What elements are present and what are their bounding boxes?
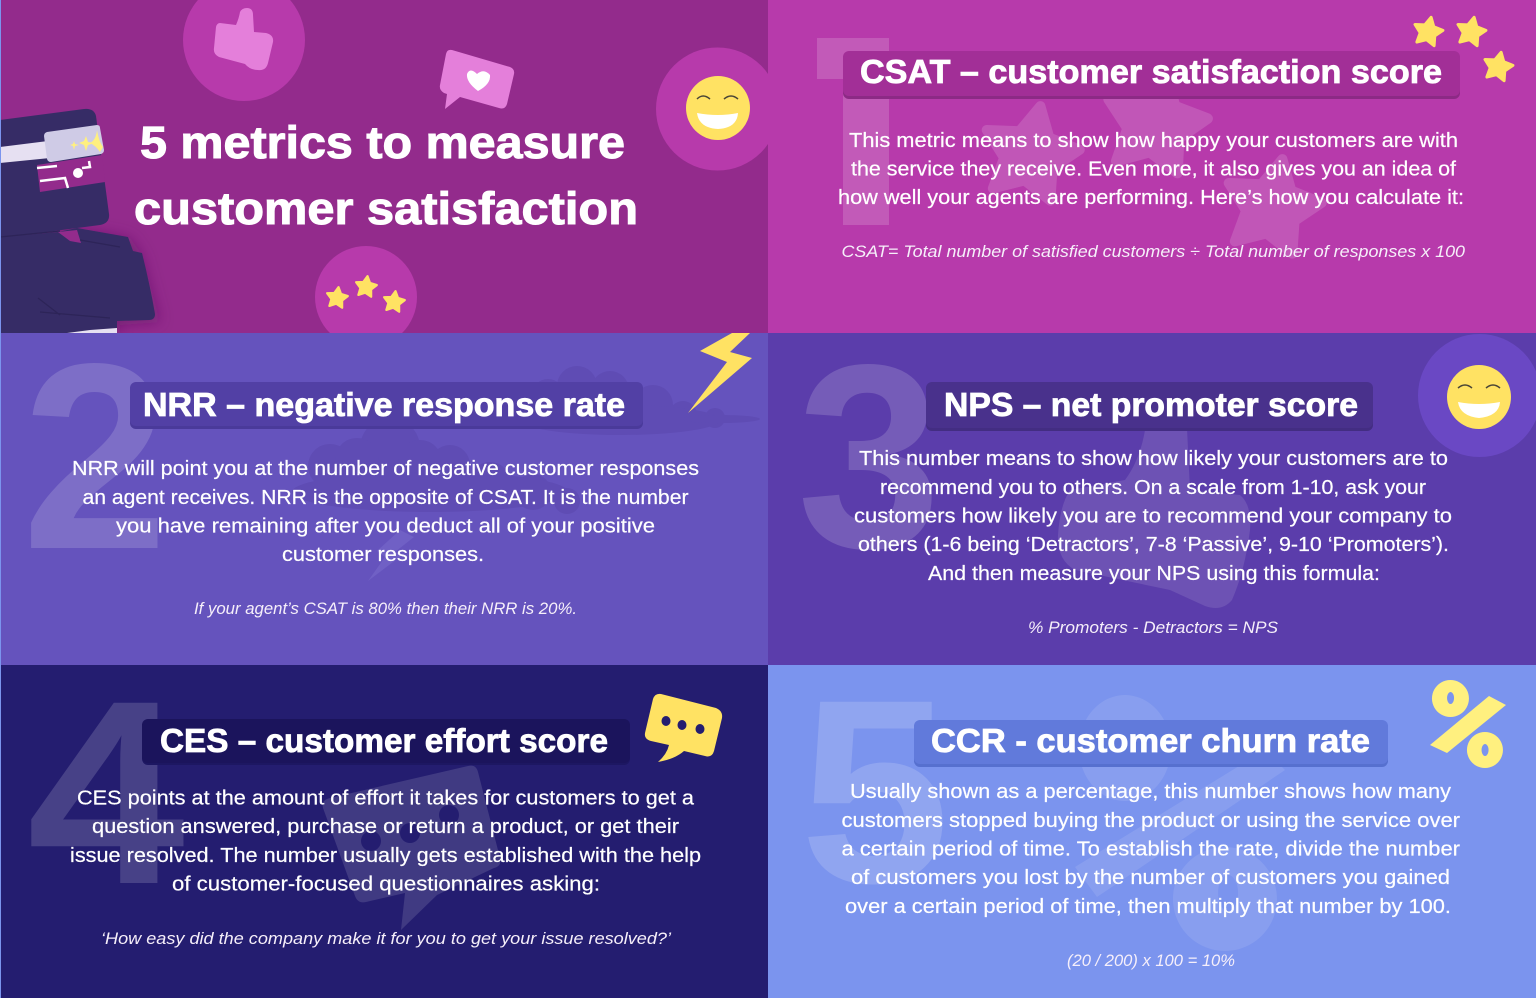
- heading: CES: CES – customer effort score: [160, 722, 608, 759]
- icon: three stars in circle: [315, 246, 417, 348]
- icon: smiling emoji in circle: [656, 48, 779, 170]
- body text: CCR: of customers you lost by the number of customers you gained: [851, 867, 1450, 889]
- panel: title: [0, 0, 779, 348]
- body text: NPS: recommend you to others. On a scale from 1-10, ask your: [880, 477, 1426, 499]
- body text: CCR: over a certain period of time, then multiply that number by 100.: [845, 896, 1451, 918]
- left edge line: [0, 0, 1, 998]
- background lightning: [368, 530, 414, 581]
- body text: NRR: you have remaining after you deduct all of your positive: [116, 516, 655, 538]
- body text: CCR: a certain period of time. To establish the rate, divide the number: [842, 838, 1460, 860]
- heading: CCR: [914, 720, 1388, 767]
- title: 5 metrics to measure: [140, 117, 625, 168]
- body text: NPS: others (1-6 being ‘Detractors’, 7-8 ‘Passive’, 9-10 ‘Promoters’).: [858, 534, 1449, 556]
- body text: NPS: And then measure your NPS using this formula:: [928, 563, 1380, 585]
- body text: NPS: This number means to show how likely your customers are to: [859, 448, 1448, 470]
- panel: NRR: [0, 309, 768, 666]
- body text: CCR: Usually shown as a percentage, this number shows how many: [850, 781, 1451, 803]
- body text: NRR: customer responses.: [282, 544, 484, 566]
- background thumbs up: [1058, 427, 1250, 608]
- background number 1: [817, 38, 889, 225]
- body text: NRR: [72, 458, 699, 566]
- body text: CCR: [842, 781, 1460, 918]
- heading: NPS: [926, 382, 1373, 431]
- heading: CCR: CCR - customer churn rate: [931, 722, 1370, 759]
- icon: thumbs up in circle: [183, 0, 305, 101]
- body text: NRR: an agent receives. NRR is the opposite of CSAT. It is the number: [82, 487, 689, 509]
- panel: CCR: [768, 645, 1536, 998]
- icon: yellow percent sign: [1430, 680, 1506, 768]
- formula: CCR: (20 / 200) x 100 = 10%: [1067, 951, 1235, 970]
- background clouds: [292, 366, 760, 514]
- icon: yellow stars: [1412, 14, 1515, 82]
- heading: CSAT: CSAT – customer satisfaction score: [860, 53, 1442, 90]
- body text: CES: of customer-focused questionnaires asking:: [172, 874, 600, 896]
- panel: NPS: [768, 310, 1536, 666]
- body text: CSAT: [838, 130, 1464, 209]
- background number 1: 1: [850, 155, 880, 211]
- panel: CES: [0, 646, 768, 998]
- body text: CES: [70, 788, 701, 896]
- body text: NPS: [854, 448, 1452, 585]
- body text: NRR: NRR will point you at the number of negative customer responses: [72, 458, 699, 480]
- example: NRR: If your agent’s CSAT is 80% then their NRR is 20%.: [194, 599, 577, 618]
- body text: CCR: customers stopped buying the product or using the service over: [842, 810, 1460, 832]
- background number 3: 3: [797, 310, 941, 603]
- heading: NRR: NRR – negative response rate: [143, 386, 625, 423]
- icon: heart speech bubble: [440, 50, 514, 109]
- title: customer satisfaction: [134, 183, 638, 234]
- icon: yellow chat bubble: [645, 694, 722, 762]
- body text: CSAT: This metric means to show how happy your customers are with: [849, 130, 1458, 152]
- formula: CSAT: CSAT= Total number of satisfied customers ÷ Total number of responses x 100: [842, 242, 1466, 261]
- title: [134, 117, 638, 234]
- heading: NPS: NPS – net promoter score: [944, 386, 1358, 423]
- body text: NPS: customers how likely you are to recommend your company to: [854, 506, 1452, 528]
- icon: smiling emoji in circle: [1418, 334, 1536, 457]
- illustration: character with headset: [0, 109, 160, 333]
- background chat bubble: [323, 766, 500, 930]
- panel: CSAT: [768, 0, 1536, 333]
- background percent sign: [1075, 695, 1285, 951]
- body text: CES: CES points at the amount of effort it takes for customers to get a: [77, 788, 695, 810]
- background number 2: 2: [22, 309, 168, 605]
- background stars: [975, 63, 1329, 257]
- background number 4: 4: [27, 646, 187, 939]
- body text: CES: question answered, purchase or return a product, or get their: [92, 816, 679, 838]
- example question: CES: ‘How easy did the company make it for you to get your issue resolved?’: [101, 929, 671, 948]
- formula: NPS: % Promoters - Detractors = NPS: [1028, 618, 1279, 637]
- body text: CES: issue resolved. The number usually gets established with the help: [70, 845, 701, 867]
- background number 5: 5: [800, 645, 950, 938]
- icon: lightning bolt: [688, 333, 752, 413]
- body text: CSAT: the service they receive. Even more, it also gives you an idea of: [851, 158, 1456, 180]
- body text: CSAT: how well your agents are performing. Here’s how you calculate it:: [838, 187, 1464, 209]
